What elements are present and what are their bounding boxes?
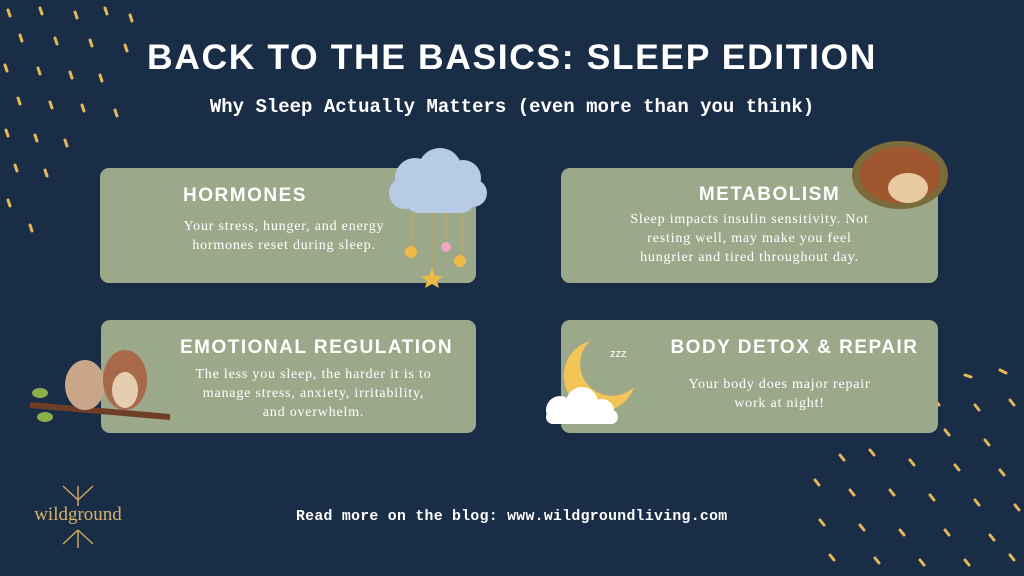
icon: owls on branch xyxy=(30,350,170,422)
panel: hormones xyxy=(100,168,476,283)
panel: emotional regulation xyxy=(101,320,476,433)
icon: moon on cloud xyxy=(546,341,634,424)
panel: hormones: HORMONES xyxy=(183,185,307,206)
panel: metabolism xyxy=(561,168,938,283)
panel: metabolism: METABOLISM xyxy=(699,184,840,205)
logo: wildground: wildground xyxy=(34,504,122,525)
panel: emotional regulation: EMOTIONAL REGULATION xyxy=(180,337,453,358)
panel: emotional regulation: and overwhelm. xyxy=(263,405,364,420)
panel: body detox: BODY DETOX & REPAIR xyxy=(670,337,919,358)
icon: moon on cloud: zzz xyxy=(610,348,626,360)
panel: body detox: work at night! xyxy=(734,396,825,411)
panel: metabolism: resting well, may make you feel xyxy=(647,231,852,246)
subtitle: Why Sleep Actually Matters (even more than you think) xyxy=(210,96,814,118)
panel: hormones: hormones reset during sleep. xyxy=(192,238,376,253)
panel: hormones: Your stress, hunger, and energy xyxy=(184,219,384,234)
panel: metabolism: hungrier and tired throughout day. xyxy=(640,250,859,265)
logo: wildground xyxy=(34,486,122,548)
panel: emotional regulation: The less you sleep, the harder it is to xyxy=(195,367,432,382)
panel: body detox xyxy=(561,320,938,433)
panel: body detox: Your body does major repair xyxy=(689,377,870,392)
title: BACK TO THE BASICS: SLEEP EDITION xyxy=(147,37,877,77)
panel: metabolism: Sleep impacts insulin sensitivity. Not xyxy=(630,212,869,227)
icon: hedgehog xyxy=(852,141,948,209)
footer link: Read more on the blog: www.wildgroundliving.com xyxy=(296,509,727,525)
icon: cloud mobile xyxy=(389,148,487,288)
panel: emotional regulation: manage stress, anxiety, irritability, xyxy=(203,386,424,401)
